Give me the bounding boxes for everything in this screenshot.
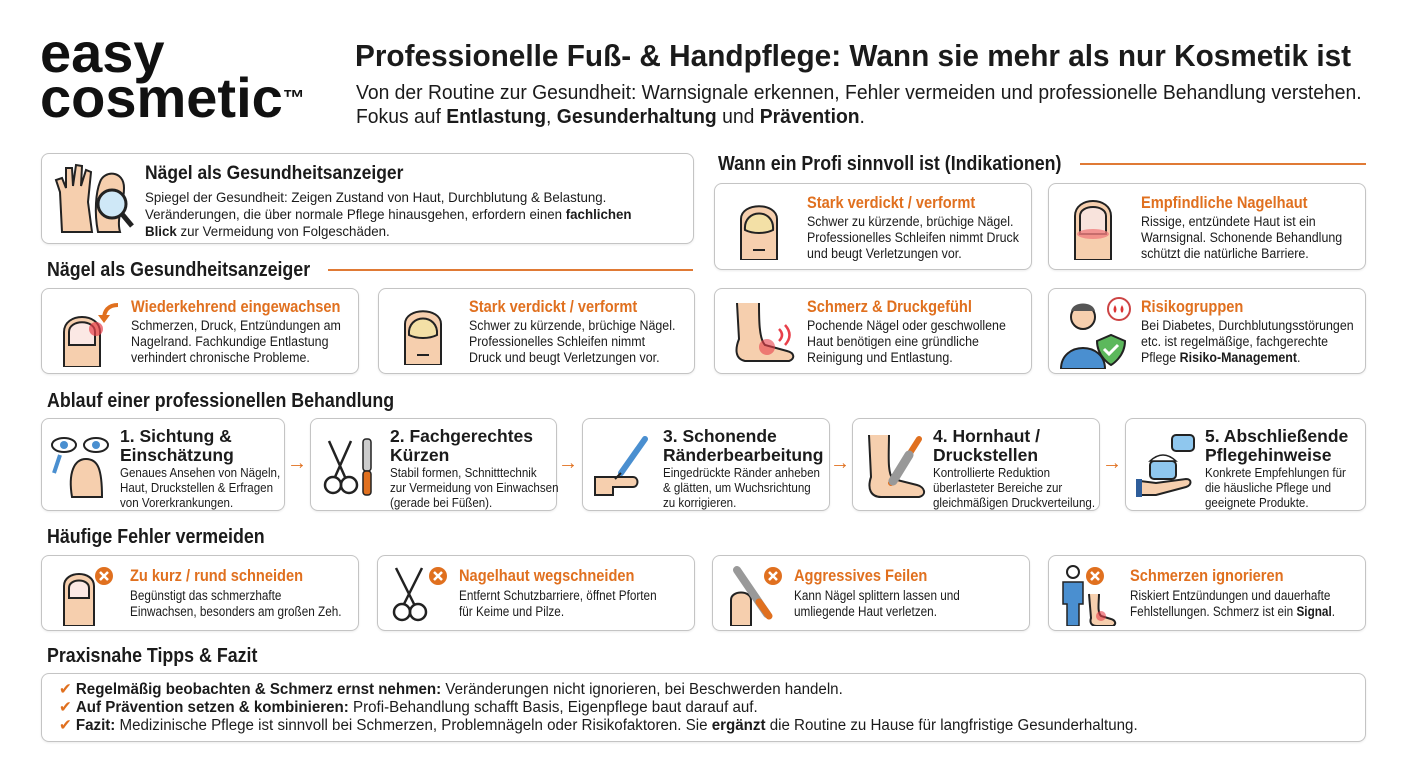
text: intro: Spiegel der Gesundheit: Zeigen Zustand von Haut, Durchblutung & Belastung. — [145, 189, 606, 205]
step 1: Einschätzung — [120, 445, 234, 465]
step 3 — [582, 418, 830, 511]
error card 1: Einwachsen, besonders am großen Zeh. — [130, 604, 342, 619]
step 2: zur Vermeidung von Einwachsen — [390, 480, 559, 495]
icon: inflamed cuticle — [1074, 200, 1112, 260]
card: Empfindliche Nagelhaut: Warnsignal. Schonende Behandlung — [1141, 230, 1342, 245]
step 5: 5. Abschließende — [1205, 426, 1348, 446]
step 1: Genaues Ansehen von Nägeln, — [120, 465, 280, 480]
error card 4: Riskiert Entzündungen und dauerhafte — [1130, 588, 1330, 603]
arrow: → — [558, 452, 578, 474]
card: Wiederkehrend eingewachsen: verhindert chronische Probleme. — [131, 350, 310, 365]
step 5: geeignete Produkte. — [1205, 495, 1309, 510]
step 2: 2. Fachgerechtes — [390, 426, 533, 446]
step 3: Ränderbearbeitung — [663, 445, 823, 465]
step 3: 3. Schonende — [663, 426, 777, 446]
step 5: Konkrete Empfehlungen für — [1205, 465, 1346, 480]
card: Risikogruppen: Bei Diabetes, Durchblutungsstörungen — [1141, 318, 1354, 333]
arrow: → — [1102, 452, 1122, 474]
card: Empfindliche Nagelhaut: schützt die natürliche Barriere. — [1141, 246, 1309, 261]
card: Stark verdickt (left): Druck und beugt Verletzungen vor. — [469, 350, 660, 365]
icon: tool on nail — [594, 436, 648, 496]
step 3: Eingedrückte Ränder anheben — [663, 465, 820, 480]
error card 2: Nagelhaut wegschneiden — [459, 566, 634, 585]
card: Empfindliche Nagelhaut — [1048, 183, 1366, 270]
step 2: Kürzen — [390, 445, 449, 465]
panel: intro — [41, 153, 694, 244]
arrow: → — [830, 452, 850, 474]
error card 4 — [1048, 555, 1366, 631]
panel: tips — [41, 673, 1366, 742]
icon: hand and foot with magnifier — [54, 164, 134, 233]
step 2 — [310, 418, 557, 511]
step 2: Stabil formen, Schnitttechnik — [390, 465, 537, 480]
error card 3: Kann Nägel splittern lassen und — [794, 588, 960, 603]
icon: foot with rasp — [868, 435, 926, 498]
logo — [40, 21, 305, 129]
card: Schmerz & Druckgefühl: Pochende Nägel oder geschwollene — [807, 318, 1006, 333]
error card 1: Begünstigt das schmerzhafte — [130, 588, 281, 603]
step 3: & glätten, um Wuchsrichtung — [663, 480, 811, 495]
error card 3: umliegende Haut verletzen. — [794, 604, 937, 619]
card: Stark verdickt (left): Stark verdickt / verformt — [469, 297, 637, 316]
card: Wiederkehrend eingewachsen: Schmerzen, Druck, Entzündungen am — [131, 318, 341, 333]
icon: scissors and file — [324, 438, 372, 496]
card: Stark verdickt (left): Professionelles Schleifen nimmt — [469, 334, 645, 349]
title: Professionelle Fuß- & Handpflege: Wann sie mehr als nur Kosmetik ist — [355, 38, 1351, 73]
step 1: Haut, Druckstellen & Erfragen — [120, 480, 273, 495]
icon: file with x — [730, 566, 782, 626]
text: intro: Nägel als Gesundheitsanzeiger — [145, 163, 403, 184]
step 1: von Vorerkrankungen. — [120, 495, 233, 510]
error card 2: für Keime und Pilze. — [459, 604, 564, 619]
step 2: (gerade bei Füßen). — [390, 495, 492, 510]
error card 1 — [41, 555, 359, 631]
step 4 — [852, 418, 1100, 511]
step 4: Kontrollierte Reduktion — [933, 465, 1050, 480]
error card 3: Aggressives Feilen — [794, 566, 927, 585]
card: Schmerz & Druckgefühl: Reinigung und Entlastung. — [807, 350, 953, 365]
card: Risikogruppen — [1048, 288, 1366, 374]
tips list: ✔ Auf Prävention setzen & kombinieren: Profi-Behandlung schafft Basis, Eigenpflege baut darauf auf. — [59, 699, 758, 716]
logo: cosmetic™ — [40, 66, 305, 129]
card: Schmerz & Druckgefühl — [714, 288, 1032, 374]
error card 1: Zu kurz / rund schneiden — [130, 566, 303, 585]
text: intro: Blick zur Vermeidung von Folgeschäden. — [145, 223, 390, 239]
card: Risikogruppen: etc. ist regelmäßige, fachgerechte — [1141, 334, 1328, 349]
subtitle: Von der Routine zur Gesundheit: Warnsignale erkennen, Fehler vermeiden und professionelle Behandlung verstehen. — [356, 82, 1362, 104]
tips list — [59, 681, 1138, 734]
text: intro — [145, 163, 632, 239]
step 1 — [41, 418, 285, 511]
card: Schmerz & Druckgefühl: Haut benötigen eine gründliche — [807, 334, 979, 349]
card: Risikogruppen: Pflege Risiko-Management. — [1141, 350, 1300, 365]
card: Stark verdickt (right top): und beugt Verletzungen vor. — [807, 246, 962, 261]
step 4: Druckstellen — [933, 445, 1038, 465]
icon: hand with cream — [1136, 434, 1195, 497]
card: Empfindliche Nagelhaut: Empfindliche Nagelhaut — [1141, 193, 1308, 212]
icon: scissors with x — [392, 567, 447, 622]
error card 2 — [377, 555, 695, 631]
card: Stark verdickt (right top) — [714, 183, 1032, 270]
heading: Nägel als Gesundheitsanzeiger: Nägel als Gesundheitsanzeiger — [47, 259, 310, 281]
step 4: überlasteter Bereiche zur — [933, 480, 1062, 495]
step 5: die häusliche Pflege und — [1205, 480, 1331, 495]
step 1: 1. Sichtung & — [120, 426, 232, 446]
heading: Indikationen: Wann ein Profi sinnvoll ist (Indikationen) — [718, 153, 1061, 175]
card: Stark verdickt (left): Schwer zu kürzende, brüchige Nägel. — [469, 318, 675, 333]
icon: thick nail — [404, 310, 442, 365]
subtitle: Fokus auf Entlastung, Gesunderhaltung und Prävention. — [356, 106, 865, 128]
card: Wiederkehrend eingewachsen: Wiederkehrend eingewachsen — [131, 297, 341, 316]
icon: painful foot — [736, 303, 794, 362]
text: intro: Veränderungen, die über normale Pflege hinausgehen, erfordern einen fachlichen — [145, 206, 632, 222]
card: Schmerz & Druckgefühl: Schmerz & Druckgefühl — [807, 297, 972, 316]
step 5 — [1125, 418, 1366, 511]
logo: easy — [40, 21, 165, 84]
tips list: ✔ Regelmäßig beobachten & Schmerz ernst nehmen: Veränderungen nicht ignorieren, bei Beschwerden handeln. — [59, 681, 843, 698]
heading: Häufige Fehler vermeiden: Häufige Fehler vermeiden — [47, 526, 265, 548]
error card 3 — [712, 555, 1030, 631]
card: Wiederkehrend eingewachsen: Nagelrand. Fachkundige Entlastung — [131, 334, 328, 349]
icon: ingrown nail — [63, 303, 118, 367]
icon: short nail with x — [63, 567, 113, 626]
error card 2: Entfernt Schutzbarriere, öffnet Pforten — [459, 588, 657, 603]
tips list: ✔ Fazit: Medizinische Pflege ist sinnvoll bei Schmerzen, Problemnägeln oder Risikofaktoren. Sie ergänzt die Routine zu Hause für langfristige Gesunderhaltung. — [59, 717, 1138, 734]
icon: eyes and foot — [51, 437, 109, 498]
arrow: → — [287, 452, 307, 474]
heading: Praxisnahe Tipps & Fazit: Praxisnahe Tipps & Fazit — [47, 645, 257, 667]
step 4: 4. Hornhaut / — [933, 426, 1040, 446]
step 5: Pflegehinweise — [1205, 445, 1331, 465]
error card 4: Fehlstellungen. Schmerz ist ein Signal. — [1130, 604, 1335, 619]
icon: thick nail — [740, 205, 778, 260]
card: Stark verdickt (left) — [378, 288, 695, 374]
error card 4: Schmerzen ignorieren — [1130, 566, 1284, 585]
card: Wiederkehrend eingewachsen — [41, 288, 359, 374]
card: Stark verdickt (right top): Professionelles Schleifen nimmt Druck — [807, 230, 1019, 245]
icon: person with shield — [1060, 297, 1131, 369]
icon: person and foot with x — [1062, 565, 1116, 626]
card: Stark verdickt (right top): Stark verdickt / verformt — [807, 193, 975, 212]
heading: Ablauf: Ablauf einer professionellen Behandlung — [47, 390, 394, 412]
step 4: gleichmäßigen Druckverteilung. — [933, 495, 1095, 510]
card: Stark verdickt (right top): Schwer zu kürzende, brüchige Nägel. — [807, 214, 1013, 229]
subtitle — [356, 82, 1362, 128]
card: Risikogruppen: Risikogruppen — [1141, 297, 1243, 316]
card: Empfindliche Nagelhaut: Rissige, entzündete Haut ist ein — [1141, 214, 1316, 229]
step 3: zu korrigieren. — [663, 495, 736, 510]
